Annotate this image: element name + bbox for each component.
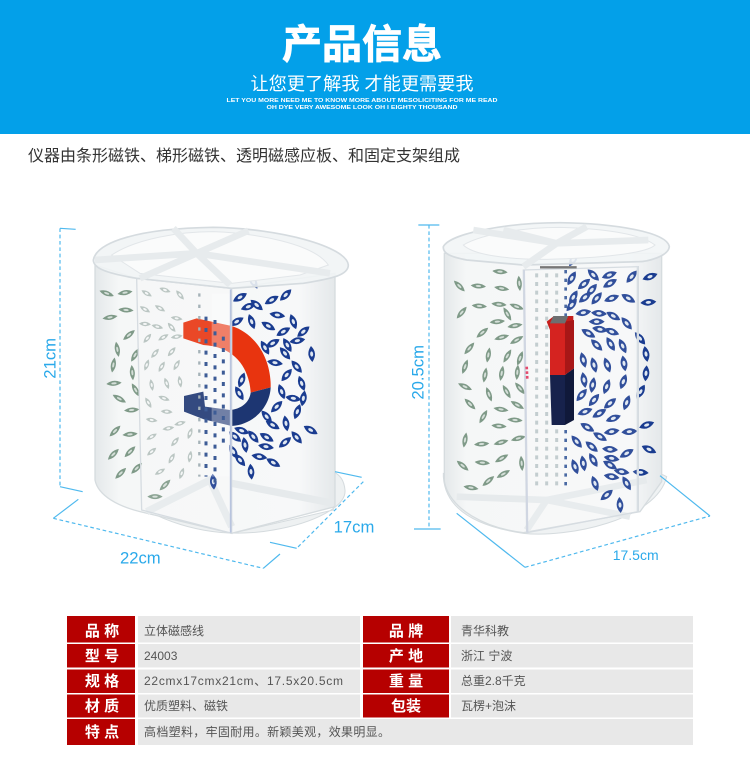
front panel <box>137 278 232 533</box>
subtitle: 让您更了解我 才能更需要我 <box>250 74 474 94</box>
row: 品称 / 品牌: 青华科教 <box>461 623 509 638</box>
cylinder body <box>95 265 335 533</box>
description line: 仪器由条形磁铁、梯形磁铁、透明磁感应板、和固定支架组成 <box>28 146 460 165</box>
front panel <box>523 267 638 533</box>
row: 品称 / 品牌: 立体磁感线 <box>144 623 204 638</box>
dimension: bar device: 17.5cm <box>613 547 659 563</box>
top plate <box>443 223 669 267</box>
row: 型号 / 产地: 24003 <box>144 649 178 663</box>
row: 品称 / 品牌 <box>67 616 693 642</box>
row: 材质 / 包装: 材 质 <box>85 697 119 715</box>
width line 22cm <box>53 518 263 568</box>
gray compass needles outer <box>99 288 172 499</box>
row: 型号 / 产地: 浙江 宁波 <box>461 648 512 663</box>
row: 品称 / 品牌: 品 称 <box>85 623 119 640</box>
row: 特点 <box>67 719 693 745</box>
dimension: horseshoe device <box>40 228 374 568</box>
row: 材质 / 包装 <box>67 694 693 718</box>
row: 材质 / 包装: 包装 <box>391 697 421 715</box>
blue pole <box>184 387 271 426</box>
row: 材质 / 包装: 优质塑料、磁铁 <box>144 698 228 713</box>
row: 规格 / 重量: 规 格 <box>85 672 119 690</box>
product photo: bar magnet device <box>443 223 669 534</box>
width line 17.5cm <box>457 476 710 567</box>
row: 材质 / 包装: 瓦楞+泡沫 <box>461 698 516 713</box>
red pole <box>183 318 271 393</box>
horseshoe magnet <box>183 318 271 426</box>
row: 型号 / 产地: 产 地 <box>389 648 423 665</box>
header banner <box>0 0 750 134</box>
gray compass needles behind front panel <box>139 286 194 480</box>
spec table <box>67 616 693 745</box>
row: 型号 / 产地 <box>67 644 693 668</box>
row: 品称 / 品牌: 品 牌 <box>389 623 423 640</box>
bar magnet <box>527 316 574 425</box>
lower disc <box>443 473 667 534</box>
dimension: horseshoe device: 21cm <box>40 338 59 379</box>
row: 特点: 高档塑料，牢固耐用。新颖美观，效果明显。 <box>144 724 390 739</box>
base spokes <box>147 480 333 527</box>
product photo: horseshoe magnet device <box>93 227 348 533</box>
english tagline: LET YOU MORE NEED ME TO KNOW MORE ABOUT MESOLICITING FOR ME READ <box>226 98 498 104</box>
gray compass needles <box>452 269 527 491</box>
top plate <box>93 227 348 288</box>
cylinder body <box>444 253 662 533</box>
depth line 17cm <box>297 482 363 548</box>
dimension: bar device: 20.5cm <box>409 345 428 400</box>
blue compass needles <box>209 235 319 490</box>
english tagline <box>226 98 498 111</box>
height line 20.5cm <box>427 225 431 528</box>
row: 规格 / 重量: 重 量 <box>389 672 423 690</box>
row: 型号 / 产地: 型 号 <box>85 648 119 665</box>
english tagline: OH DYE VERY AWESOME LOOK OH I EIGHTY THOUSAND <box>266 105 458 111</box>
title: 产品信息 <box>282 23 442 67</box>
base spokes <box>457 480 647 530</box>
blue compass needles <box>564 251 659 513</box>
row: 规格 / 重量: 总重2.8千克 <box>461 674 526 688</box>
row: 特点: 特 点 <box>85 723 119 741</box>
row: 规格 / 重量 <box>67 670 693 693</box>
height line 21cm <box>58 228 62 487</box>
dimension: horseshoe device: 17cm <box>334 517 374 536</box>
dimension: horseshoe device: 22cm <box>120 549 161 568</box>
row: 规格 / 重量: 22cmx17cmx21cm、17.5x20.5cm <box>144 674 343 688</box>
base plate <box>140 472 345 533</box>
dimension: bar device <box>409 225 710 567</box>
